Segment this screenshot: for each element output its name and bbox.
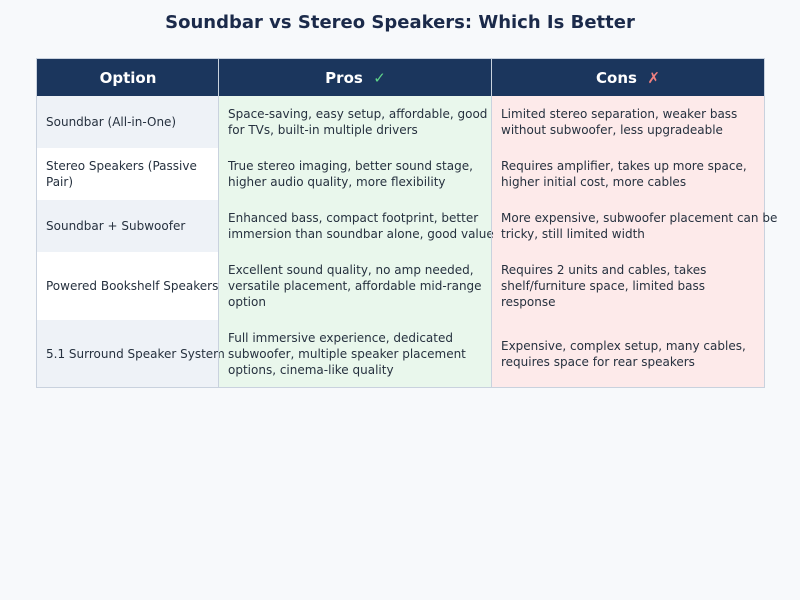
header: pros <box>219 59 492 96</box>
table: response <box>501 295 556 309</box>
table: higher audio quality, more flexibility <box>228 175 446 189</box>
table: requires space for rear speakers <box>501 354 695 368</box>
table: Expensive, complex setup, many cables, <box>501 338 746 352</box>
table: Requires amplifier, takes up more space, <box>501 159 747 173</box>
table: higher initial cost, more cables <box>501 175 686 189</box>
row 5: 5.1 Surround Speaker System <box>46 346 225 360</box>
header: cons <box>492 59 764 96</box>
row 2: Stereo Speakers (Passive <box>46 159 197 173</box>
table: options, cinema-like quality <box>228 362 394 376</box>
row 2 <box>37 148 219 200</box>
row 3 <box>37 200 219 252</box>
table: option <box>228 295 266 309</box>
title: Soundbar vs Stereo Speakers: Which Is Better <box>165 12 635 33</box>
row 1 <box>37 96 219 148</box>
table: Space-saving, easy setup, affordable, good <box>228 107 487 121</box>
table: More expensive, subwoofer placement can be <box>501 211 777 225</box>
header: pros: Pros <box>325 68 363 86</box>
table: Enhanced bass, compact footprint, better <box>228 211 478 225</box>
header: option: Option <box>100 68 156 86</box>
table: versatile placement, affordable mid-range <box>228 279 482 293</box>
table: Limited stereo separation, weaker bass <box>501 107 737 121</box>
row 2: Pair) <box>46 175 73 189</box>
row 3: Soundbar + Subwoofer <box>46 219 185 233</box>
table <box>36 58 765 388</box>
table: tricky, still limited width <box>501 227 645 241</box>
table: without subwoofer, less upgradeable <box>501 123 723 137</box>
row 4: Powered Bookshelf Speakers <box>46 279 218 293</box>
table: for TVs, built-in multiple drivers <box>228 123 418 137</box>
row 5 <box>37 320 219 387</box>
row 1: Soundbar (All-in-One) <box>46 115 176 129</box>
header: option <box>37 59 219 96</box>
table: immersion than soundbar alone, good value <box>228 227 494 241</box>
row 4 <box>37 252 219 320</box>
table: True stereo imaging, better sound stage, <box>228 159 473 173</box>
header: cons: Cons <box>596 68 637 86</box>
table: Requires 2 units and cables, takes <box>501 263 706 277</box>
header: pros: ✓ <box>373 68 386 86</box>
table: Full immersive experience, dedicated <box>228 330 453 344</box>
table: subwoofer, multiple speaker placement <box>228 346 466 360</box>
header: cons: ✗ <box>647 68 660 86</box>
table: Excellent sound quality, no amp needed, <box>228 263 474 277</box>
table: shelf/furniture space, limited bass <box>501 279 705 293</box>
